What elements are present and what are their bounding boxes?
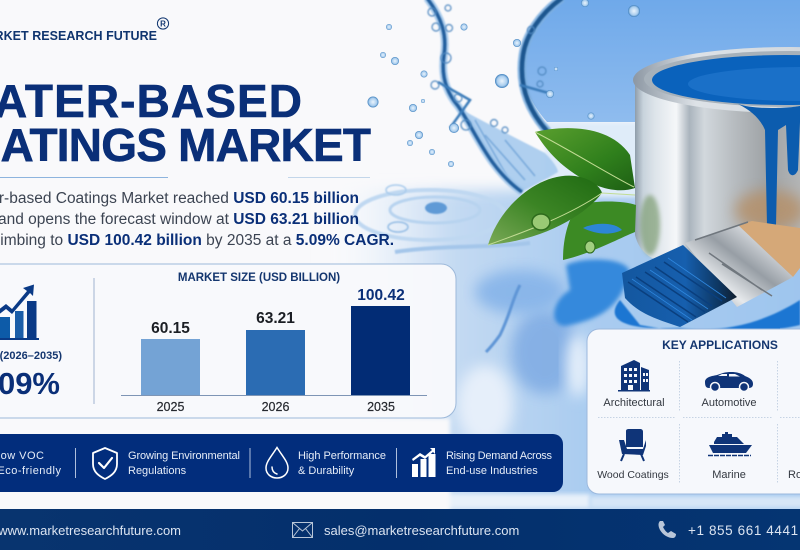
label: marine: Marine (712, 469, 746, 481)
chart title: MARKET SIZE (USD BILLION) (178, 272, 340, 284)
logo: Market Research Future: R (160, 20, 166, 28)
driver: demand: Rising Demand Across (446, 450, 552, 462)
water ripples (355, 185, 530, 252)
paint can (633, 47, 800, 265)
icon: water drop (266, 448, 288, 478)
paint brush (622, 221, 800, 327)
bar chart: 2025 (157, 400, 184, 414)
bar chart (121, 287, 427, 414)
label: automotive: Automotive (701, 397, 757, 409)
driver: regulations: Regulations (128, 465, 187, 477)
panel: growth drivers (0, 434, 563, 492)
panel: market size (0, 264, 456, 418)
icon: shield (93, 448, 117, 479)
floor shading (511, 310, 579, 394)
phone number: +1 855 661 4441 (688, 523, 799, 538)
driver: performance: & Durability (298, 465, 355, 477)
bar chart: 100.42 (357, 287, 405, 304)
intro paragraph: and opens the forecast window at USD 63.21 billion (0, 211, 359, 228)
website: www.marketresearchfuture.com (0, 523, 181, 538)
icon: car (705, 372, 753, 392)
heading: KEY APPLICATIONS (662, 338, 778, 352)
icon: ship (708, 432, 752, 456)
water splash (368, 0, 640, 192)
driver: regulations: Growing Environmental (128, 450, 240, 462)
email: sales@marketresearchfuture.com (324, 523, 519, 538)
title divider (0, 176, 370, 178)
icon: building (618, 360, 650, 392)
icon: rising bars (412, 448, 436, 477)
icon: armchair (619, 429, 646, 461)
label: wood coatings: Wood Coatings (597, 469, 669, 481)
bar chart: 63.21 (256, 310, 295, 327)
panel: key applications (587, 329, 800, 494)
title (0, 75, 371, 171)
footer bar (0, 509, 800, 550)
green leaves (488, 128, 636, 260)
driver: demand: End-use Industries (446, 465, 538, 477)
label: architectural: Architectural (603, 397, 665, 409)
intro paragraph: climbing to USD 100.42 billion by 2035 at a 5.09% CAGR. (0, 232, 394, 249)
icon: envelope (292, 522, 312, 538)
logo: Market Research Future (0, 18, 169, 43)
paint spill and reflections (486, 259, 800, 352)
bar chart: 60.15 (151, 320, 190, 337)
icon: phone (658, 521, 676, 538)
icon: growth chart (0, 284, 39, 340)
bar chart: 2035 (367, 400, 395, 414)
intro paragraph (0, 190, 394, 249)
paint drips (738, 104, 800, 226)
driver: performance: High Performance (298, 450, 386, 462)
bar chart: 2026 (262, 400, 289, 414)
